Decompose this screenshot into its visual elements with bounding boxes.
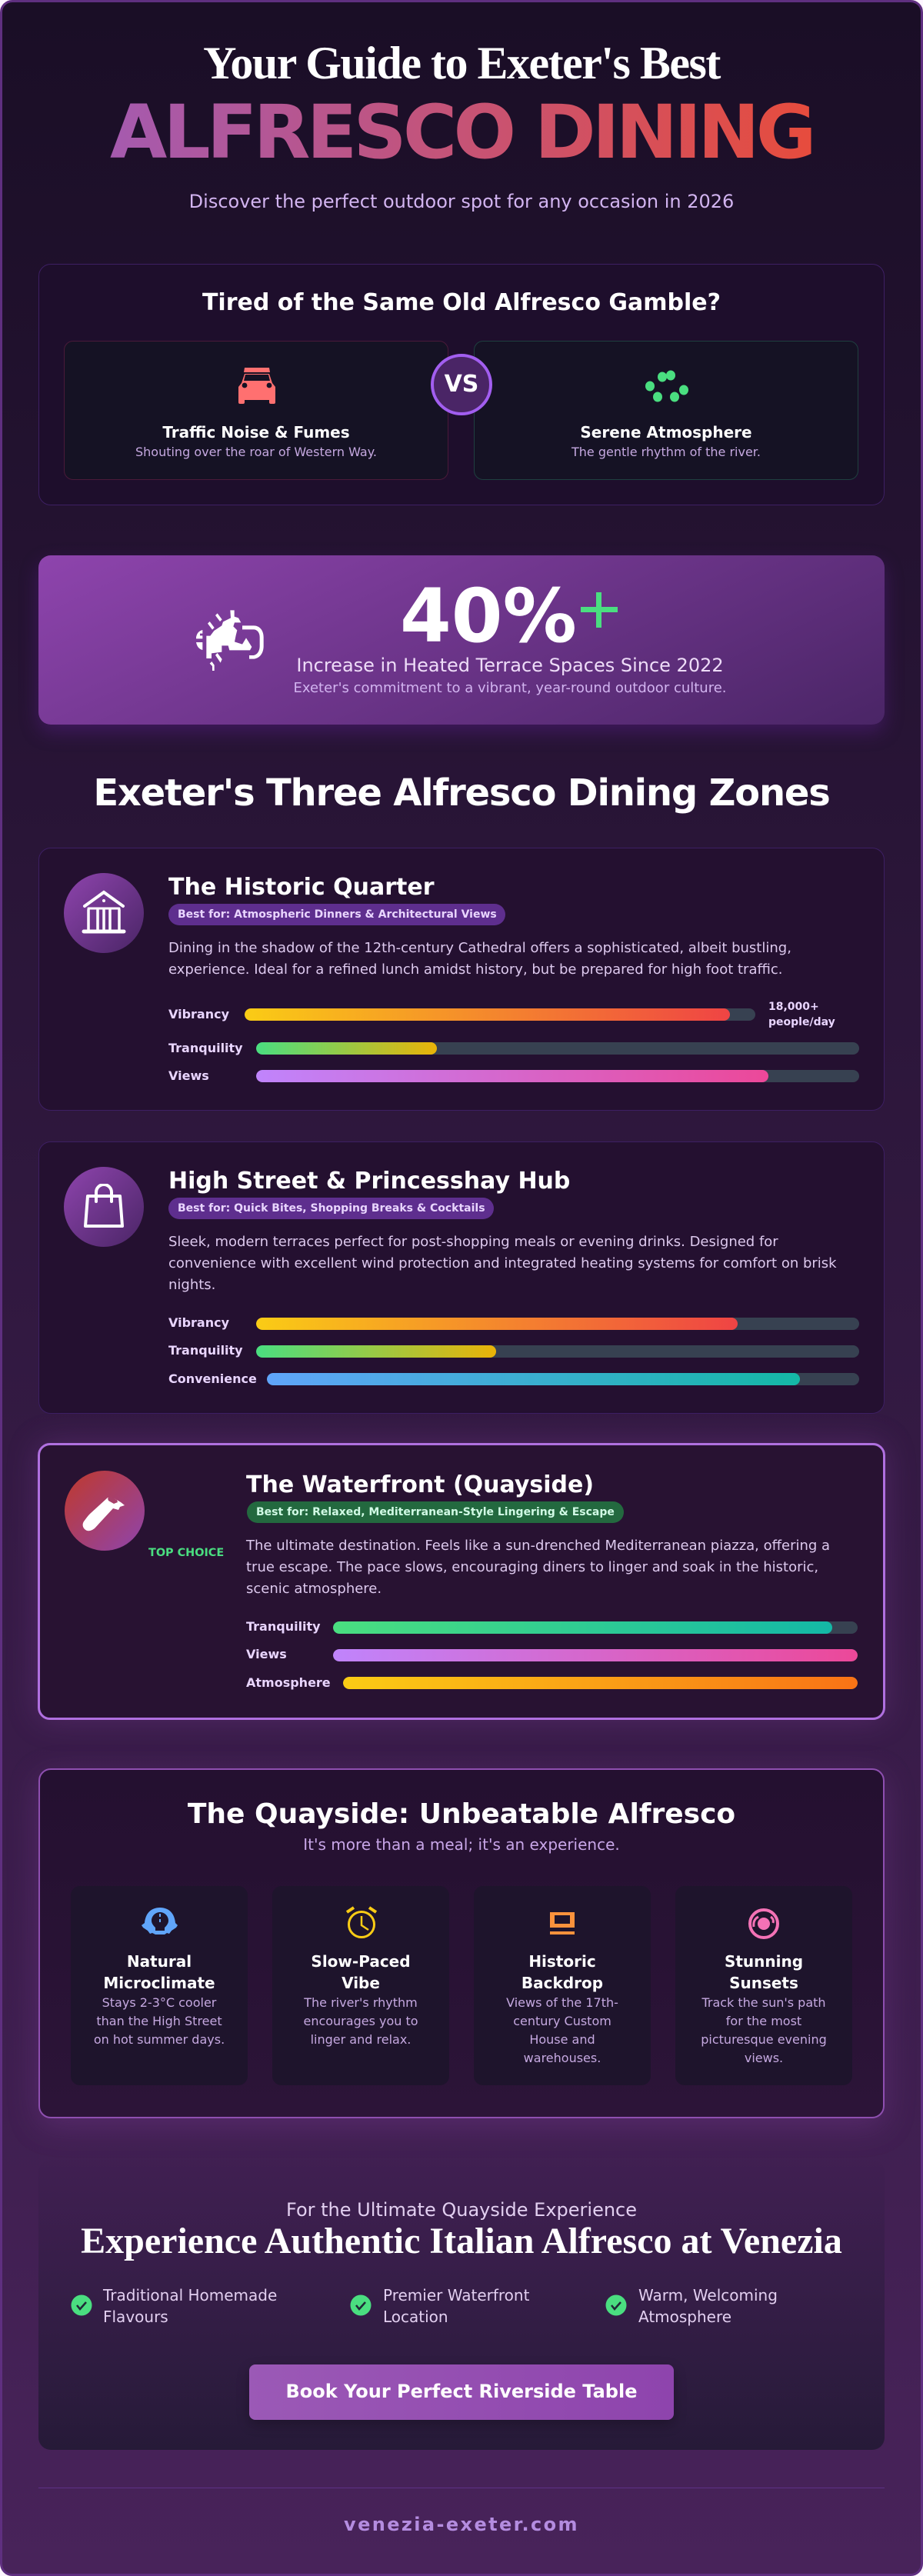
slow-paced title: Slow-Paced	[311, 1952, 411, 1971]
stat description: Exeter's commitment to a vibrant, year-round outdoor culture.	[293, 680, 727, 696]
panel: high street	[38, 1141, 885, 1414]
sunsets description: picturesque evening	[701, 2032, 827, 2047]
panel: the problem	[38, 264, 885, 505]
historic tag: Best for: Atmospheric Dinners & Architectural Views	[178, 908, 497, 921]
microclimate description	[94, 1995, 225, 2047]
section heading: Exeter's Three Alfresco Dining Zones	[93, 771, 830, 815]
slow-paced title	[311, 1952, 411, 1992]
feature 3: Atmosphere	[638, 2308, 731, 2326]
check icon 3	[606, 2295, 626, 2315]
title line: Your Guide to Exeter's Best	[203, 38, 720, 88]
footer URL: venezia-exeter.com	[344, 2514, 579, 2535]
problem heading: Tired of the Same Old Alfresco Gamble?	[202, 289, 721, 316]
waterfront description: scenic atmosphere.	[246, 1581, 382, 1597]
historic description: experience. Ideal for a refined lunch amidst history, but be prepared for high foot traffic.	[168, 961, 783, 978]
label: convenience: Convenience	[168, 1371, 257, 1386]
traffic description: Shouting over the roar of Western Way.	[135, 445, 377, 459]
bar: tranquility	[333, 1621, 858, 1634]
label: views: Views	[168, 1068, 209, 1083]
bar: views	[333, 1649, 858, 1661]
label: vibrancy: Vibrancy	[168, 1315, 229, 1330]
feature 1: Flavours	[103, 2308, 168, 2326]
waterfront description: The ultimate destination. Feels like a sun-drenched Mediterranean piazza, offering a	[246, 1538, 830, 1554]
slow-paced description	[303, 1995, 418, 2047]
historic title: The Historic Quarter	[168, 874, 434, 901]
high street tag: Best for: Quick Bites, Shopping Breaks & Cocktails	[178, 1202, 485, 1215]
high street description: Sleek, modern terraces perfect for post-shopping meals or evening drinks. Designed for	[168, 1234, 778, 1250]
feature 2	[383, 2286, 529, 2326]
sunsets title	[725, 1952, 803, 1992]
slow-paced description: linger and relax.	[311, 2032, 411, 2047]
backdrop title	[521, 1952, 603, 1992]
high street description	[168, 1234, 837, 1293]
feature 2: Location	[383, 2308, 448, 2326]
backdrop title: Backdrop	[521, 1974, 603, 1992]
backdrop description: House and	[529, 2032, 595, 2047]
high street description: nights.	[168, 1277, 215, 1293]
bar: tranquility	[256, 1042, 859, 1055]
icon: alarm clock	[346, 1906, 377, 1938]
card: traffic noise	[64, 341, 448, 480]
waterfront tag: Best for: Relaxed, Mediterranean-Style Lingering & Escape	[256, 1506, 615, 1518]
label: views: Views	[246, 1647, 287, 1661]
subtitle: Discover the perfect outdoor spot for any occasion in 2026	[189, 191, 734, 212]
slow-paced description: encourages you to	[303, 2014, 418, 2028]
big stat: 40%	[400, 573, 577, 659]
bar: vibrancy	[256, 1318, 859, 1330]
backdrop title: Historic	[528, 1952, 596, 1971]
microclimate title	[103, 1952, 215, 1992]
stat label: Increase in Heated Terrace Spaces Since 2022	[296, 655, 724, 676]
sunsets title: Sunsets	[729, 1974, 798, 1992]
icon: microclimate	[142, 1908, 178, 1934]
historic description	[168, 940, 791, 978]
serene title: Serene Atmosphere	[580, 423, 752, 442]
quayside subheading: It's more than a meal; it's an experience.	[303, 1835, 620, 1854]
icon: sunset	[748, 1908, 779, 1939]
bar: convenience	[267, 1373, 859, 1385]
bar: vibrancy	[245, 1008, 755, 1021]
backdrop description: century Custom	[513, 2014, 611, 2028]
card: slow-paced vibe	[272, 1886, 449, 2085]
card: serene atmosphere	[474, 341, 858, 480]
label: tranquility: Tranquility	[168, 1343, 243, 1358]
slow-paced title: Vibe	[342, 1974, 380, 1992]
quayside heading: The Quayside: Unbeatable Alfresco	[188, 1798, 735, 1830]
sunsets description: views.	[745, 2051, 783, 2065]
icon: cathedral	[64, 873, 144, 953]
microclimate title: Natural	[127, 1952, 192, 1971]
slow-paced description: The river's rhythm	[304, 1995, 418, 2010]
badge: VS: VS	[445, 371, 478, 398]
button	[249, 2364, 674, 2420]
CTA kicker: For the Ultimate Quayside Experience	[286, 2199, 637, 2221]
icon: building frame	[550, 1912, 575, 1934]
backdrop description	[506, 1995, 618, 2065]
card: historic backdrop	[474, 1886, 651, 2085]
label: tranquility: Tranquility	[168, 1041, 243, 1055]
bar: tranquility	[256, 1345, 859, 1358]
panel: waterfront	[38, 1443, 885, 1720]
sunsets description: Track the sun's path	[701, 1995, 826, 2010]
high street tag	[168, 1198, 494, 1219]
check icon 2	[351, 2295, 371, 2315]
icon: shopping bag	[64, 1167, 144, 1247]
microclimate description: Stays 2-3°C cooler	[102, 1995, 216, 2010]
check icon 1	[71, 2295, 92, 2315]
waterfront description	[246, 1538, 830, 1597]
high street description: convenience with excellent wind protection and integrated heating systems for comfort on brisk	[168, 1255, 837, 1271]
panel: quayside benefits	[38, 1768, 885, 2118]
footfall note: 18,000+	[768, 1001, 819, 1013]
button: Book Your Perfect Riverside Table	[286, 2381, 637, 2402]
historic tag	[168, 904, 505, 925]
footfall note: people/day	[768, 1016, 835, 1028]
card: natural microclimate	[71, 1886, 248, 2085]
label: tranquility: Tranquility	[246, 1619, 321, 1634]
stat plus	[581, 592, 618, 628]
icon: dots	[645, 371, 688, 402]
CTA heading: Experience Authentic Italian Alfresco at Venezia	[81, 2221, 842, 2261]
icon: car	[238, 368, 275, 404]
icon: waterfront	[65, 1471, 145, 1551]
banner: heated terrace stat	[38, 555, 885, 725]
sunsets title: Stunning	[725, 1952, 803, 1971]
top choice label: TOP CHOICE	[148, 1547, 224, 1559]
microclimate description: on hot summer days.	[94, 2032, 225, 2047]
waterfront title: The Waterfront (Quayside)	[246, 1471, 594, 1498]
bar: views	[256, 1070, 859, 1082]
feature 3: Warm, Welcoming	[638, 2286, 778, 2304]
badge: VS	[431, 354, 492, 415]
sunsets description	[701, 1995, 827, 2065]
label: atmosphere: Atmosphere	[246, 1675, 331, 1690]
sunsets description: for the most	[726, 2014, 801, 2028]
backdrop description: Views of the 17th-	[506, 1995, 618, 2010]
label: vibrancy: Vibrancy	[168, 1007, 229, 1021]
historic description: Dining in the shadow of the 12th-century Cathedral offers a sophisticated, albeit bustling,	[168, 940, 791, 956]
panel: call to action	[38, 2160, 885, 2450]
microclimate title: Microclimate	[103, 1974, 215, 1992]
feature 3	[638, 2286, 778, 2326]
waterfront description: true escape. The pace slows, encouraging diners to linger and soak in the historic,	[246, 1559, 818, 1575]
bar: atmosphere	[343, 1677, 858, 1689]
traffic title: Traffic Noise & Fumes	[162, 423, 350, 442]
feature 2: Premier Waterfront	[383, 2286, 529, 2304]
footfall note	[768, 1001, 835, 1028]
serene description: The gentle rhythm of the river.	[571, 445, 761, 459]
panel: historic quarter	[38, 848, 885, 1111]
icon: heater	[196, 610, 264, 671]
card: stunning sunsets	[675, 1886, 852, 2085]
title highlight: alfresco dining: ALFRESCO DINING	[110, 89, 813, 175]
microclimate description: than the High Street	[96, 2014, 222, 2028]
backdrop description: warehouses.	[524, 2051, 601, 2065]
waterfront tag	[247, 1501, 624, 1523]
high street title: High Street & Princesshay Hub	[168, 1168, 570, 1195]
feature 1: Traditional Homemade	[103, 2286, 277, 2304]
feature 1	[103, 2286, 277, 2326]
